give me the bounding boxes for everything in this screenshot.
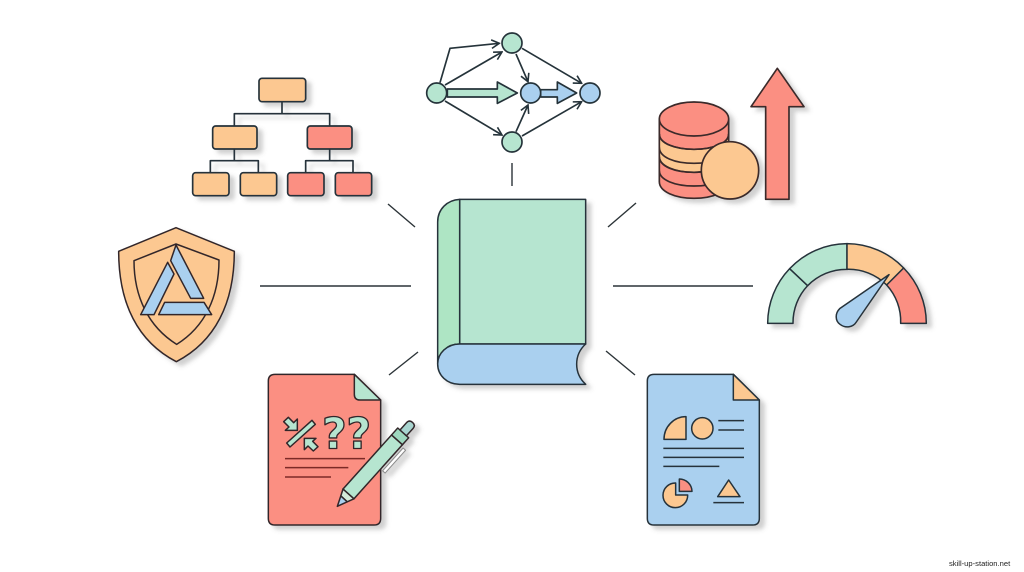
question marks: ??: [322, 409, 371, 459]
pen: [332, 418, 422, 515]
icon: flow network graph: [427, 33, 600, 152]
icon: gauge meter: [768, 244, 926, 327]
thin network arrows: [440, 43, 582, 136]
small arrow bottom-right: [304, 438, 318, 451]
icon: shield with triangle: [119, 228, 234, 362]
watermark: skill-up-station.net: [949, 559, 1011, 568]
icon: hierarchy org chart: [193, 78, 372, 196]
icon: quiz document with pen: [268, 374, 422, 525]
icon: report document with charts: [647, 374, 759, 525]
central book icon: [438, 199, 586, 384]
connector lines: [260, 163, 753, 375]
answer lines: [285, 459, 365, 477]
small arrow top-left: [284, 417, 297, 430]
slash bar: [287, 420, 315, 447]
icon: database coin and up arrow: [659, 68, 804, 199]
